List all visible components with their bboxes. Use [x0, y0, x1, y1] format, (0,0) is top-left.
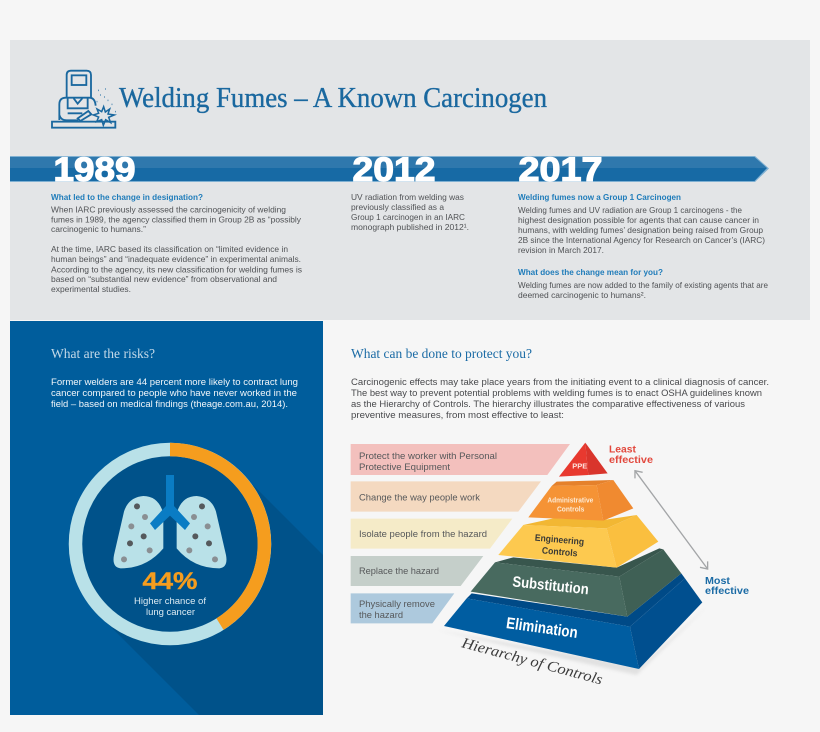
text block: protect: as the Hierarchy of Controls. The hierarchy illustrates the comparative effectiveness of various	[351, 399, 745, 410]
text block: 1989: human beings” and “inadequate evidence” in experimental animals.	[51, 254, 301, 264]
icon: welder	[52, 71, 116, 128]
text block: 2012	[351, 192, 469, 232]
pyramid: engineering controls: Controls	[541, 545, 578, 558]
text block: 1989: What led to the change in designation?	[51, 192, 203, 202]
label: least effective	[609, 444, 653, 466]
pyramid: administrative controls	[528, 480, 633, 521]
text block: 1989: carcinogenic to humans.”	[51, 224, 146, 234]
caption: higher chance: lung cancer	[146, 606, 195, 617]
text block: 2012: UV radiation from welding was	[351, 192, 464, 202]
caption: higher chance: Higher chance of	[134, 595, 206, 606]
label: elimination action	[359, 599, 435, 620]
text block: 2017: highest designation possible for agents that can cause cancer in	[518, 215, 759, 225]
year: 1989: 1989	[54, 151, 136, 189]
heading: protect: What can be done to protect you?	[351, 347, 532, 362]
text block: risks: Former welders are 44 percent more likely to contract lung	[51, 377, 298, 388]
text block: 2017: revision in March 2017.	[518, 245, 604, 255]
title: Welding Fumes – A Known Carcinogen	[119, 83, 547, 114]
label: PPE action: Protective Equipment	[359, 462, 450, 472]
heading: risks: What are the risks?	[51, 347, 155, 362]
text block: protect: Carcinogenic effects may take place years from the initiating event to a clinical diagnosis of cancer.	[351, 377, 769, 388]
text block: 2017: Welding fumes and UV radiation are Group 1 carcinogens - the	[518, 205, 742, 215]
text block: 2017: deemed carcinogenic to humans².	[518, 290, 646, 300]
pyramid: elimination: Elimination	[505, 615, 579, 642]
year: 2012: 2012	[352, 151, 436, 189]
text block: 1989: based on “substantial new evidence” from observational and	[51, 274, 277, 284]
pyramid: engineering controls: Engineering	[534, 533, 585, 547]
label: admin action: Change the way people work	[359, 492, 480, 502]
text block: 1989: According to the agency, its new classification for welding fumes is	[51, 264, 302, 274]
pyramid: administrative controls: Administrative	[547, 497, 593, 504]
icon: lungs	[114, 475, 226, 568]
donut chart: 44%	[76, 450, 264, 638]
text block: 1989: experimental studies.	[51, 284, 131, 294]
label: least effective: Least	[609, 444, 636, 456]
label: least effective: effective	[609, 454, 653, 466]
pyramid: PPE: PPE	[572, 462, 587, 471]
text block: 2017	[518, 192, 768, 300]
caption: higher chance	[134, 595, 206, 617]
label: most effective	[705, 575, 749, 597]
label: most effective: effective	[705, 585, 749, 597]
text block: 2017: Welding fumes are now added to the family of existing agents that are	[518, 280, 768, 290]
text block: protect: The best way to prevent potential problems with welding fumes is to enact OSHA guidelines known	[351, 388, 762, 399]
text block: 2012: monograph published in 2012¹.	[351, 222, 469, 232]
label: most effective: Most	[705, 575, 731, 587]
arrow: effectiveness	[635, 471, 708, 569]
pyramid: substitution	[471, 548, 681, 617]
text block: 2017: Welding fumes now a Group 1 Carcinogen	[518, 192, 681, 202]
label: elimination action: Physically remove	[359, 599, 435, 609]
label: substitution action: Replace the hazard	[359, 566, 439, 576]
hierarchy of controls diagram	[351, 443, 708, 675]
text block: 1989: When IARC previously assessed the carcinogenicity of welding	[51, 204, 286, 214]
year: 2017: 2017	[518, 151, 602, 189]
text block: 2017: 2B since the International Agency for Research on Cancer’s (IARC)	[518, 235, 765, 245]
label: PPE action: Protect the worker with Personal	[359, 451, 497, 461]
text block: risks	[51, 377, 298, 410]
pyramid: engineering controls	[498, 515, 658, 568]
text block: risks: field – based on medical findings (theage.com.au, 2014).	[51, 399, 288, 410]
label: engineering action: Isolate people from the hazard	[359, 529, 487, 539]
label: PPE action	[359, 451, 497, 472]
text block: 1989	[51, 192, 302, 294]
text block: protect	[351, 377, 769, 421]
pyramid: administrative controls: Controls	[557, 507, 584, 514]
pyramid: PPE	[559, 443, 608, 477]
pyramid: substitution: Substitution	[512, 573, 590, 598]
label: elimination action: the hazard	[359, 610, 403, 620]
arrow: timeline	[10, 156, 769, 182]
pyramid: elimination	[444, 573, 702, 669]
stat: 44%: 44%	[142, 568, 198, 595]
caption: hierarchy of controls: Hierarchy of Controls	[459, 635, 604, 688]
text block: 1989: At the time, IARC based its classification on “limited evidence in	[51, 244, 288, 254]
text block: protect: preventive measures, from most effective to least:	[351, 410, 564, 421]
text block: 1989: fumes in 1989, the agency classified them in Group 2B as “possibly	[51, 214, 302, 224]
panel: timeline background	[10, 40, 810, 320]
text block: 2012: previously classified as a	[351, 202, 444, 212]
pyramid shadow	[437, 607, 707, 675]
text block: risks: cancer compared to people who have never worked in the	[51, 388, 297, 399]
text block: 2017: humans, with welding fumes’ designation being raised from Group	[518, 225, 763, 235]
text block: 2012: Group 1 carcinogen in an IARC	[351, 212, 465, 222]
label bands	[351, 444, 570, 623]
text block: 2017: What does the change mean for you?	[518, 267, 663, 277]
panel: risks	[10, 321, 330, 720]
